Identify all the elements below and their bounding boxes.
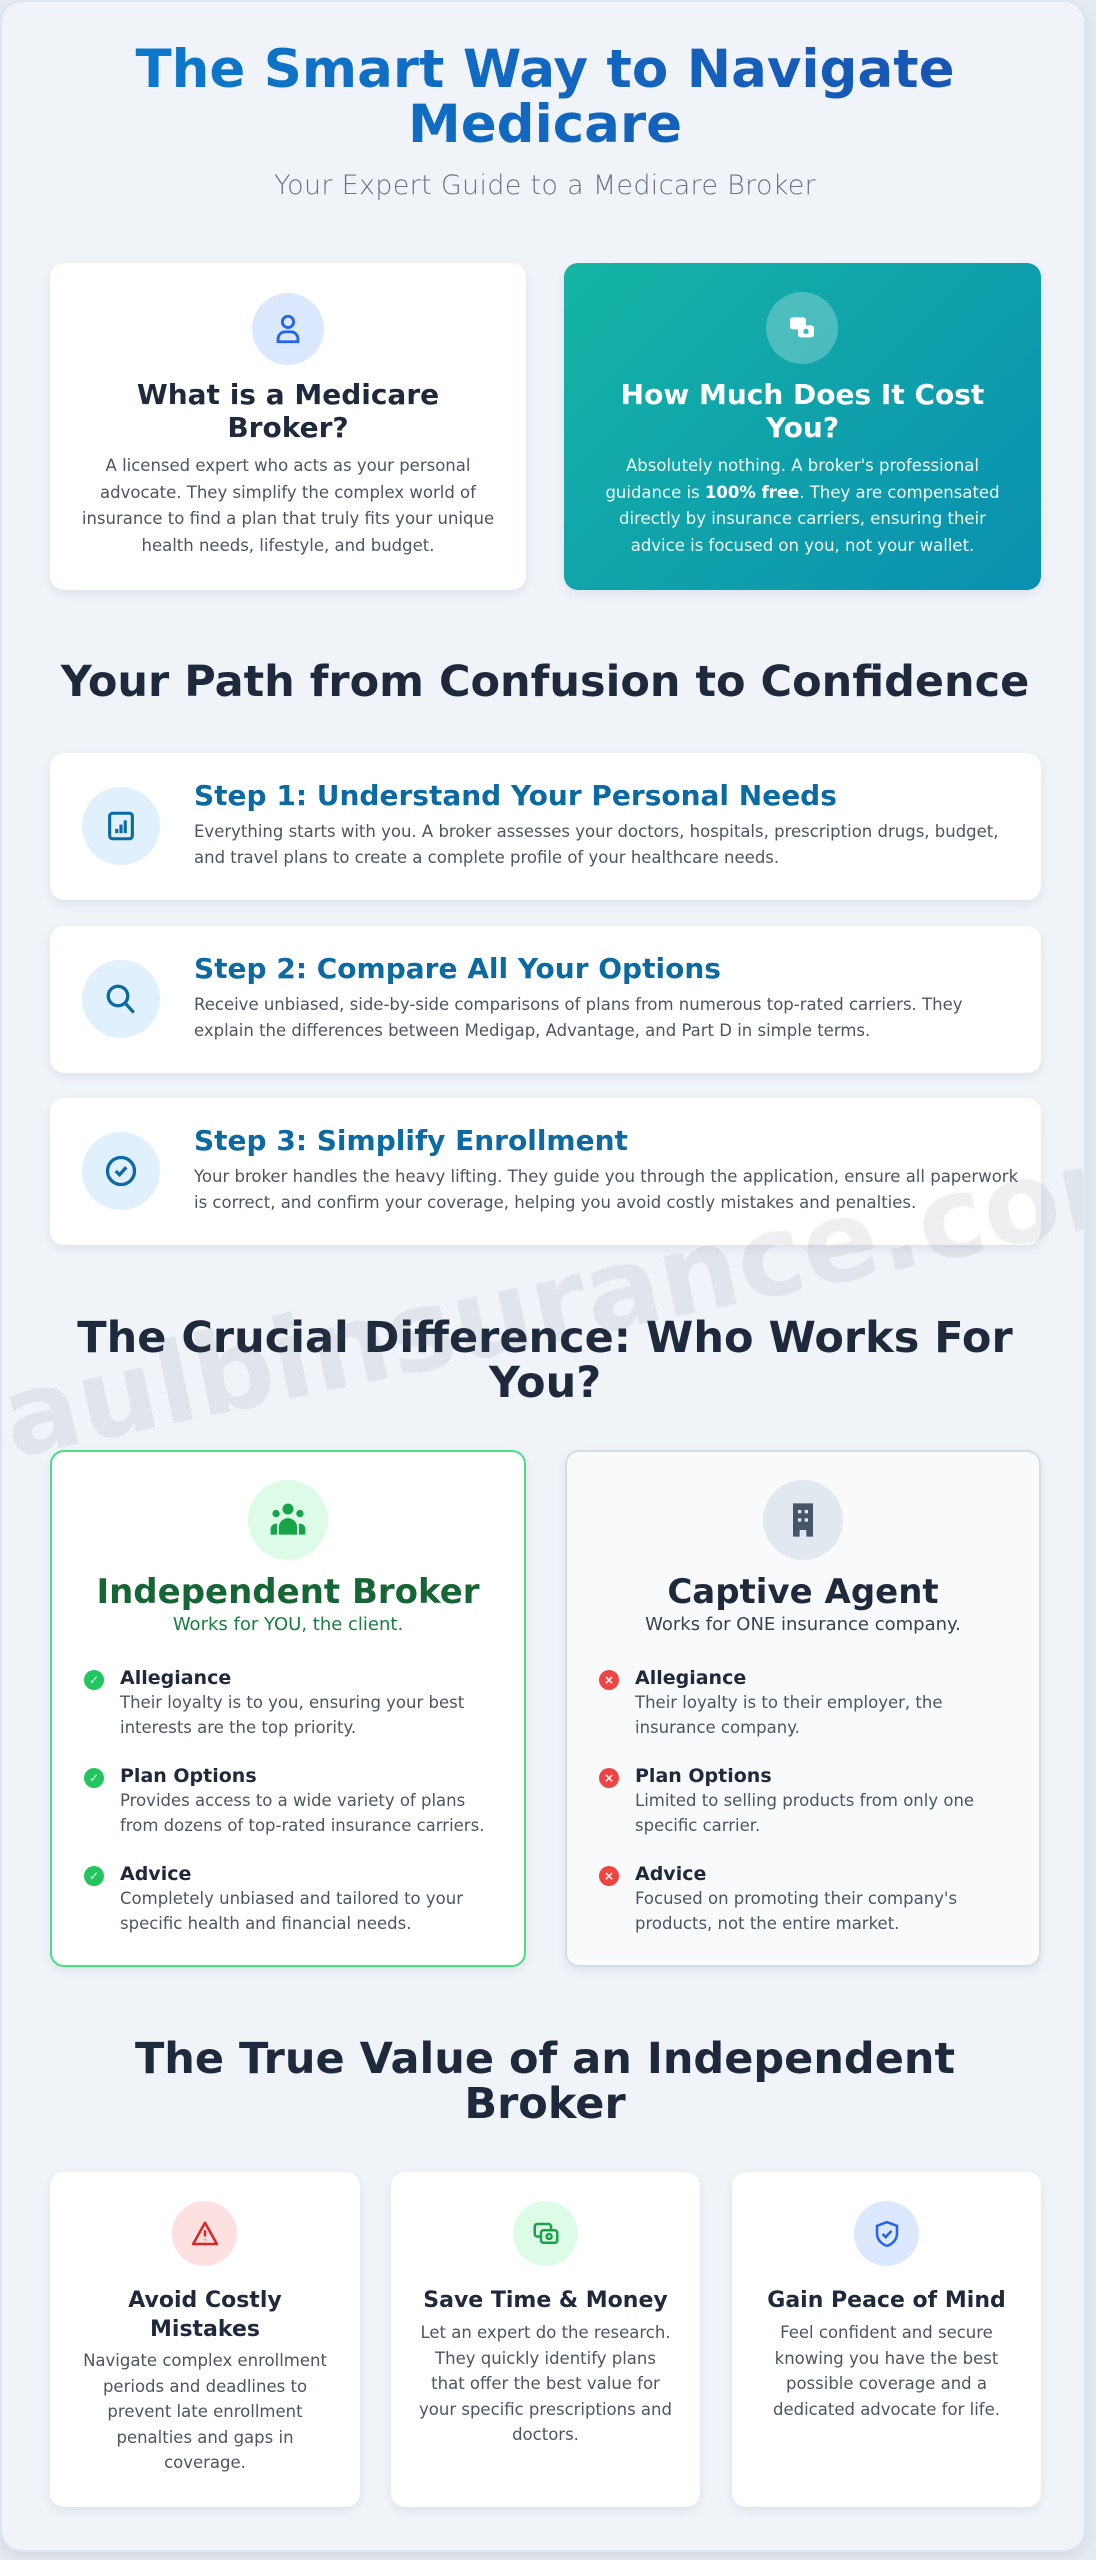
icon: people [248,1480,328,1560]
step title: Step 3: Simplify Enrollment [194,1124,628,1157]
list: benefits: Allegiance [120,1667,231,1689]
heading: Avoid Costly [128,2288,282,2313]
panel: captive agent: Limited to selling products from only one specific carrier. [635,1791,974,1835]
heading [621,378,984,444]
title: Medicare [408,94,682,155]
list: drawbacks: Their loyalty is to their employer, the insurance company. [635,1693,942,1737]
panel: what is a broker [50,263,526,590]
panel: independent broker: Completely unbiased and tailored to your specific health and financial needs. [120,1889,463,1933]
heading: You? [766,411,839,444]
step 3 [50,1098,1041,1245]
value card: time money [391,2172,700,2507]
value card: peace [732,2172,1041,2507]
heading: difference [77,1313,1013,1408]
heading: How Much Does It Cost [621,378,984,411]
title [2,42,1088,152]
step text: Your broker handles the heavy lifting. They guide you through the application, ensure all paperwork is correct, and confirm your coverage, helping you avoid costly mistakes and penalties. [194,1167,1018,1212]
list: drawbacks [599,1667,942,1737]
panel: independent broker: Plan Options [120,1765,257,1787]
panel: captive agent: × [604,1673,614,1687]
icon: person [252,293,324,365]
panel: cost [564,263,1041,590]
panel: captive agent: Advice [635,1863,706,1885]
text: Let an expert do the research. They quickly identify plans that offer the best value for your specific prescriptions and doctors. [419,2323,672,2444]
step 2 [50,926,1041,1073]
icon: check circle [82,1132,160,1210]
heading: Independent Broker [96,1572,480,1612]
panel: captive agent [565,1450,1041,1967]
text: Absolutely nothing. A broker's professional guidance is 100% free. They are compensated directly by insurance carriers, ensuring their advice is focused on you, not your wallet. [605,456,1000,554]
heading: Broker? [227,411,349,444]
heading: true value [135,2034,955,2129]
panel: independent broker [50,1450,526,1967]
step 1 [50,753,1041,900]
step title: Step 2: Compare All Your Options [194,952,721,985]
icon: warning [172,2201,237,2266]
tagline: Works for ONE insurance company. [645,1614,961,1635]
icon: chart [82,787,160,865]
list: benefits: Their loyalty is to you, ensuring your best interests are the top priority. [120,1693,464,1737]
heading: true value: The True Value of an Independent [135,2034,955,2084]
heading: What is a Medicare [137,378,439,411]
subtitle: Your Expert Guide to a Medicare Broker [274,170,816,201]
step title: Step 1: Understand Your Personal Needs [194,779,837,812]
panel: captive agent: Focused on promoting their company's products, not the entire market. [635,1889,957,1933]
icon: cash [513,2201,578,2266]
value card: mistakes [50,2172,360,2507]
heading: Captive Agent [667,1572,939,1612]
text: Feel confident and secure knowing you have the best possible coverage and a dedicated advocate for life. [773,2323,1000,2418]
list: drawbacks: Allegiance [635,1667,746,1689]
panel: independent broker: ✓ [89,1869,99,1883]
panel: independent broker: ✓ [89,1771,99,1785]
heading: Gain Peace of Mind [767,2288,1006,2313]
heading [137,378,439,444]
icon: search [82,960,160,1038]
heading: true value: Broker [464,2079,626,2129]
heading [128,2288,282,2342]
icon: shield [854,2201,919,2266]
panel: captive agent: Plan Options [635,1765,772,1787]
panel: independent broker: ✓ [89,1673,99,1687]
step text: Everything starts with you. A broker assesses your doctors, hospitals, prescription drugs, budget, and travel plans to create a complete profile of your healthcare needs. [194,822,999,867]
heading: difference: The Crucial Difference: Who Works For [77,1313,1013,1363]
text: Navigate complex enrollment periods and deadlines to prevent late enrollment penalties and gaps in coverage. [83,2351,327,2472]
icon: money [766,292,838,364]
title: The Smart Way to Navigate [135,39,955,100]
step text: Receive unbiased, side-by-side comparisons of plans from numerous top-rated carriers. They explain the differences between Medigap, Advantage, and Part D in simple terms. [194,995,962,1040]
panel: captive agent: × [604,1869,614,1883]
panel: captive agent: × [604,1771,614,1785]
panel: independent broker: Advice [120,1863,191,1885]
text: A licensed expert who acts as your personal advocate. They simplify the complex world of insurance to find a plan that truly fits your unique health needs, lifestyle, and budget. [82,456,494,554]
tagline: Works for YOU, the client. [173,1614,403,1635]
heading: Mistakes [150,2317,260,2342]
icon: building [763,1480,843,1560]
panel: independent broker: Provides access to a wide variety of plans from dozens of top-rated insurance carriers. [120,1791,484,1835]
heading: difference: You? [489,1358,601,1408]
list: benefits [84,1667,464,1737]
heading: Save Time & Money [423,2288,668,2313]
heading: path: Your Path from Confusion to Confidence [61,657,1029,707]
